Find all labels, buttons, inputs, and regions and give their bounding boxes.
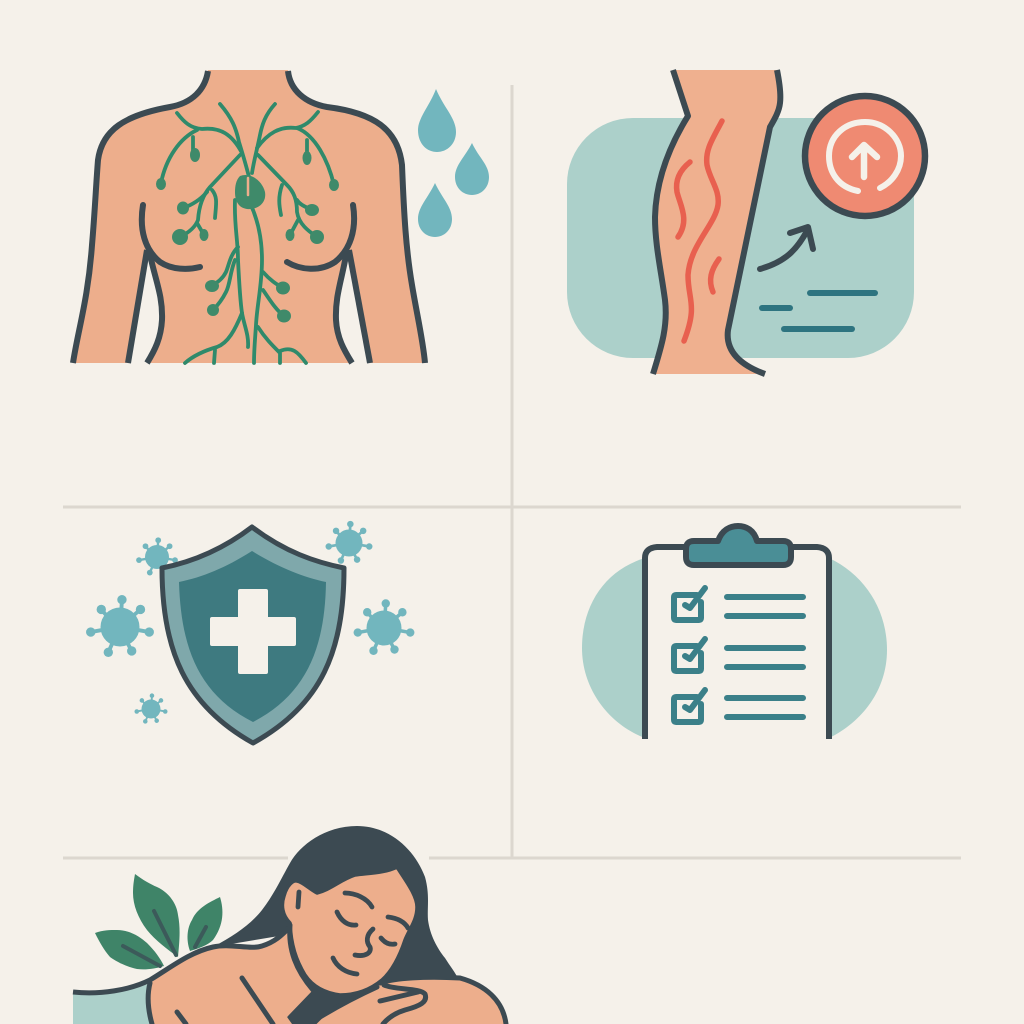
leg fill [653,70,780,374]
lymphatic vessels [161,104,334,363]
curved arrow [760,227,813,269]
torso body [73,70,425,363]
clipboard side edges [645,547,829,739]
shoulder and arm lines [73,925,506,1024]
dash lines [762,293,875,329]
icon: circular up badge [805,96,925,216]
row 1 [674,588,803,620]
lymph nodes [156,148,339,322]
mint background panel [567,118,914,358]
checklist [674,588,803,722]
row 3 [674,690,803,722]
panel: shield and viruses [86,521,414,743]
icon: leaves [95,874,222,969]
icon: viruses [86,521,414,724]
panel: clipboard checklist [582,526,887,739]
clip [686,526,791,565]
veins [677,121,722,341]
body [149,927,313,1024]
panel: leg with varicose veins [567,70,925,374]
icon: shield [162,527,344,743]
facial features [298,892,408,974]
leg outline [653,70,780,374]
clipboard sheet [645,546,829,739]
panel: torso with lymphatic system [73,70,425,363]
face [282,867,417,995]
mint cushion [73,983,150,1024]
icon: water drops [418,89,489,237]
panel: woman resting [73,826,506,1024]
torso outline [73,71,425,363]
mint background blob [582,558,887,738]
row 2 [674,639,803,671]
hair [213,826,459,1024]
arm [315,976,505,1024]
